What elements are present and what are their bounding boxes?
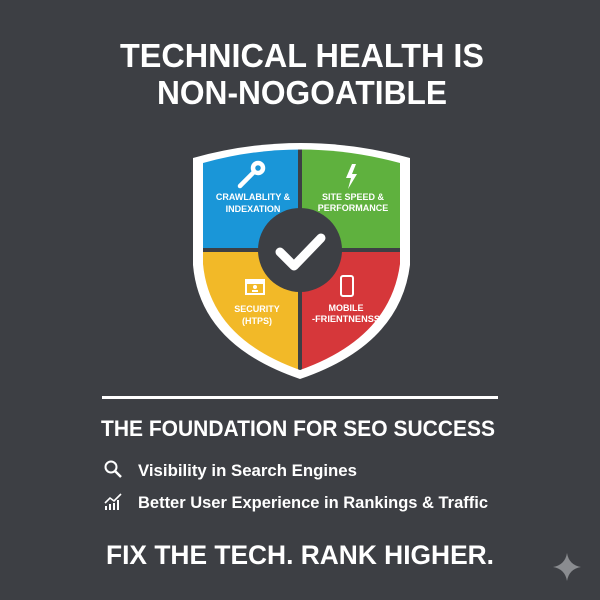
label: site speed: PERFORMANCE <box>318 203 388 213</box>
label: security: SECURITY <box>234 304 280 314</box>
label: site speed: SITE SPEED & <box>322 192 385 202</box>
label: mobile <box>312 303 380 324</box>
icon: secure browser <box>245 279 265 295</box>
icon: phone <box>341 276 353 296</box>
icon: sparkle <box>553 553 581 581</box>
shield <box>193 130 410 380</box>
bullet: visibility: Visibility in Search Engines <box>138 461 357 480</box>
label: mobile: -FRIENTNENSS <box>312 314 380 324</box>
title <box>120 37 484 111</box>
quadrant: security <box>203 252 300 370</box>
label: crawlability: CRAWLABLITY & <box>216 192 291 202</box>
bullet: user experience: Better User Experience in Rankings & Traffic <box>138 493 488 512</box>
divider <box>102 396 498 399</box>
title: TECHNICAL HEALTH IS <box>120 37 484 74</box>
center check badge <box>258 208 342 292</box>
label: security: (HTPS) <box>242 316 272 326</box>
label: crawlability: INDEXATION <box>226 204 280 214</box>
title: NON-NOGOATIBLE <box>157 74 447 111</box>
label: site speed <box>318 192 388 213</box>
icon: lightning <box>346 164 357 189</box>
footer tagline: FIX THE TECH. RANK HIGHER. <box>106 540 494 570</box>
quadrant: mobile <box>300 252 400 370</box>
label: mobile: MOBILE <box>328 303 364 313</box>
label: security <box>234 304 280 326</box>
icon: wrench <box>240 163 263 186</box>
quadrant: crawlability <box>203 150 300 248</box>
quadrant: site speed <box>302 150 400 248</box>
subheading: THE FOUNDATION FOR SEO SUCCESS <box>101 416 495 441</box>
label: crawlability <box>216 192 291 214</box>
